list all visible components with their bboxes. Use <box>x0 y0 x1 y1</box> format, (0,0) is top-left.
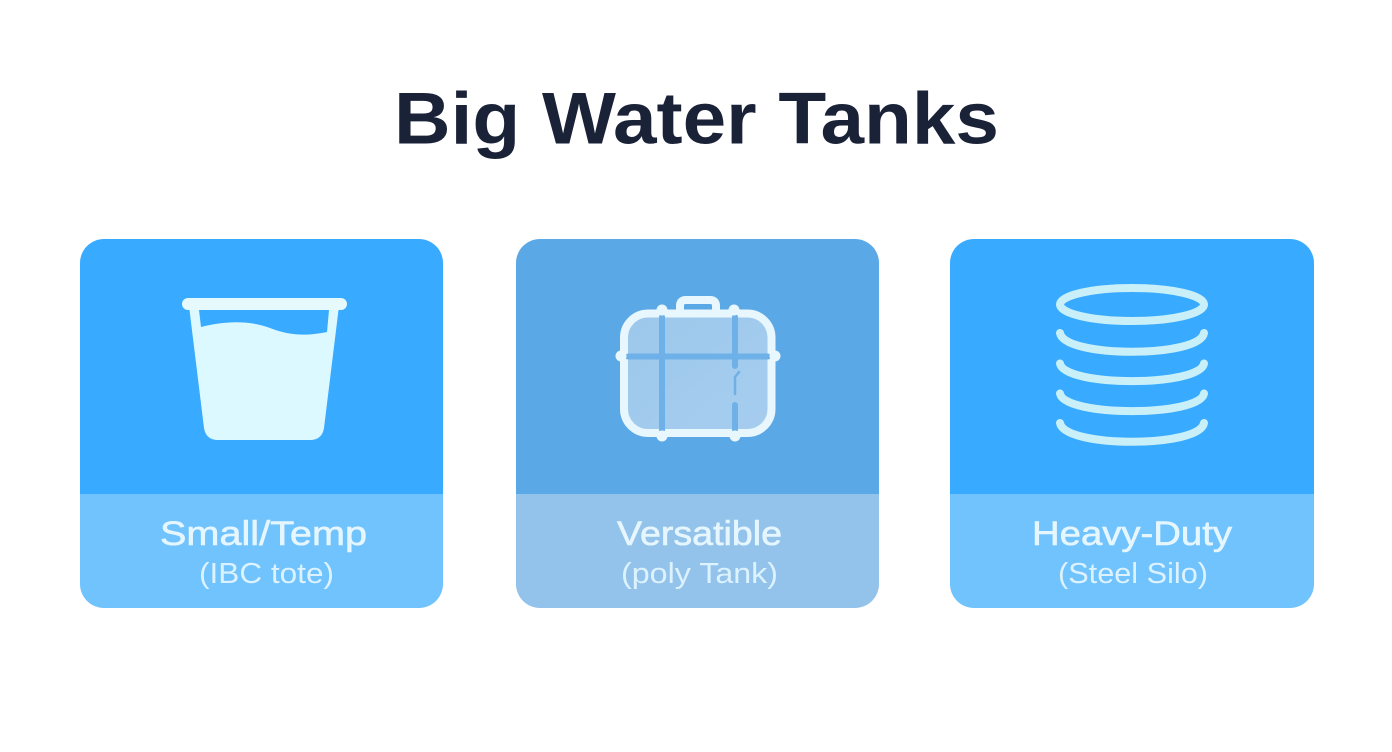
panel: small/temp IBC tote <box>80 239 443 608</box>
label: poly Tank: (poly Tank) <box>621 558 778 590</box>
icon: bucket <box>182 298 347 440</box>
icon: poly tank <box>616 300 780 442</box>
label: Heavy-Duty: Heavy-Duty <box>1032 515 1232 553</box>
label: Small/Temp: Small/Temp <box>160 515 367 553</box>
panel: heavy-duty steel silo <box>950 239 1314 608</box>
title: Big Water Tanks <box>394 78 999 160</box>
label: Versatible: Versatible <box>617 515 782 553</box>
panel: versatile poly tank <box>516 239 879 608</box>
label: IBC tote: (IBC tote) <box>199 558 334 590</box>
label: Steel Silo: (Steel Silo) <box>1058 558 1208 590</box>
icon: steel silo <box>1060 288 1204 442</box>
